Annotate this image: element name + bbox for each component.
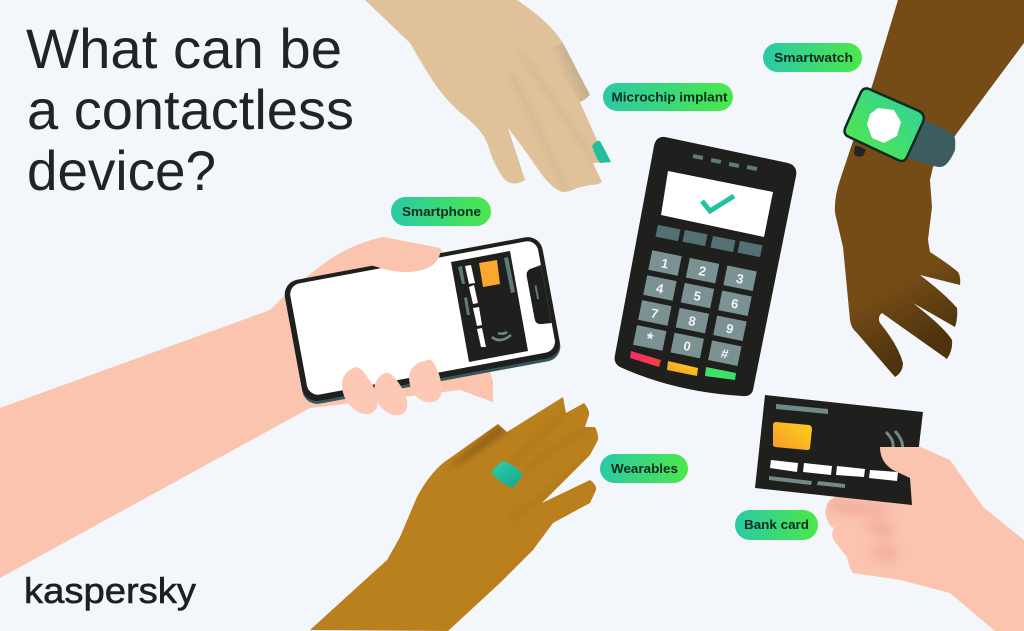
terminal keypad: 8 [687, 313, 697, 329]
label: Microchip implant: Microchip implant [612, 90, 728, 104]
hand with smartwatch [835, 0, 1024, 377]
terminal screen [661, 171, 773, 237]
hand with ring [310, 397, 598, 631]
card top stripe [776, 404, 828, 414]
terminal keypad: 7 [650, 305, 660, 322]
label: Bank card: Bank card [744, 518, 809, 532]
label: Wearables: Wearables [611, 462, 678, 476]
hand holding bank card [755, 395, 1024, 631]
label: Bank card [735, 510, 818, 540]
title: device? [27, 139, 216, 202]
terminal colour buttons [630, 351, 661, 367]
icon: ring [491, 461, 523, 488]
terminal keypad: 1 [660, 255, 670, 272]
label: Smartphone: Smartphone [402, 205, 481, 219]
terminal keypad: 3 [735, 271, 745, 287]
phone notch [525, 265, 552, 326]
bank card [755, 395, 923, 505]
payment terminal [615, 137, 796, 396]
terminal soft keys [656, 225, 762, 257]
terminal keypad: 6 [730, 296, 740, 312]
thumb over card [880, 447, 983, 540]
terminal keypad: 9 [725, 321, 735, 337]
terminal keypad: 2 [697, 263, 707, 279]
title: What can be [26, 17, 342, 80]
smartphone [282, 235, 563, 415]
card number blocks [770, 460, 898, 481]
icon: card chip [773, 422, 812, 450]
icon: watch face [845, 88, 924, 161]
terminal indicator slots [693, 154, 757, 171]
card on phone screen [451, 251, 528, 362]
thumb over phone [345, 237, 440, 272]
fingers over phone [342, 360, 442, 415]
logo: kaspersky: kaspersky [24, 570, 196, 611]
terminal keypad [633, 250, 757, 367]
label: Smartwatch: Smartwatch [774, 51, 853, 65]
terminal keypad: 4 [655, 280, 666, 297]
title [26, 17, 354, 202]
label: Microchip implant [603, 83, 733, 111]
arm holding smartphone [0, 235, 563, 578]
label: Wearables [600, 454, 688, 483]
terminal keypad: 5 [692, 288, 702, 304]
terminal keypad: 0 [682, 338, 692, 354]
icon: watch strap [908, 118, 955, 167]
terminal keypad: * [644, 329, 655, 349]
title: a contactless [27, 78, 354, 141]
terminal keypad: # [720, 346, 731, 362]
label: Smartphone [391, 197, 491, 226]
card chip on phone [479, 260, 500, 287]
label: Smartwatch [763, 43, 862, 72]
icon: hexagon [867, 108, 901, 143]
icon: check mark [702, 196, 734, 211]
icon: implant nail [592, 141, 611, 163]
hand with microchip implant [365, 0, 611, 192]
